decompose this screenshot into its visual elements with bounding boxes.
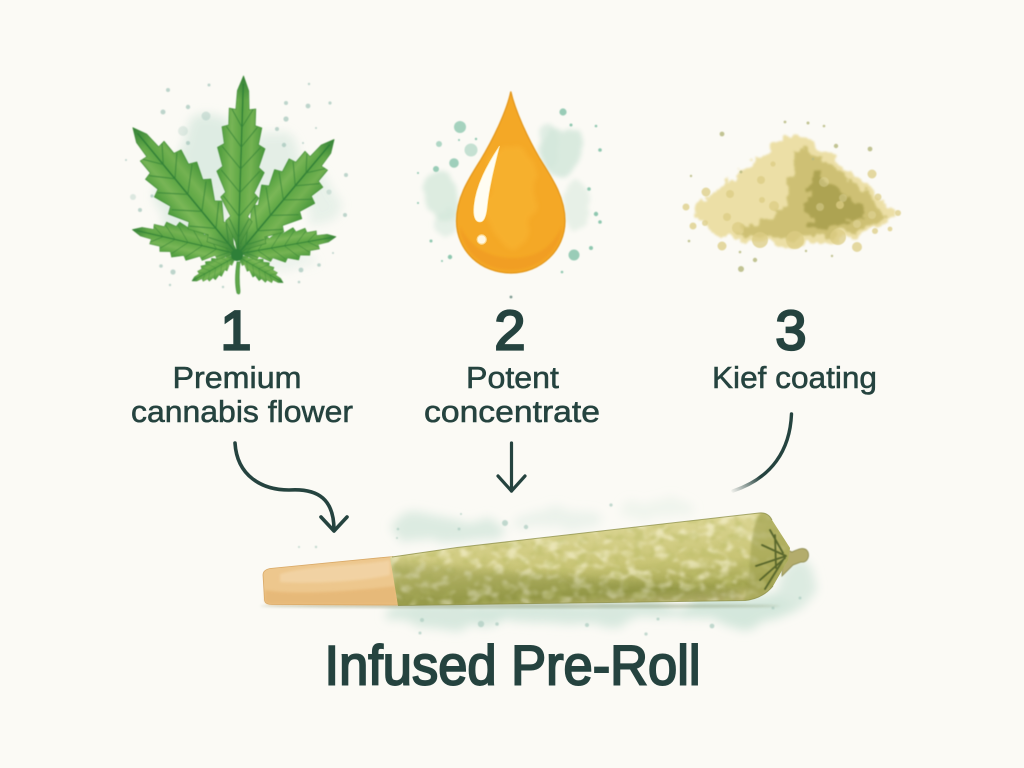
paper tip highlight: [280, 560, 390, 583]
twist folds: [756, 530, 786, 589]
kief granules: [682, 121, 901, 272]
pre-roll splatter dots: [298, 503, 802, 636]
arrow: flower to pre-roll: [235, 443, 347, 531]
step 1 label: cannabis flower: [131, 394, 353, 429]
arrow: concentrate to pre-roll: [498, 443, 525, 491]
drop splatter dots: [417, 108, 602, 298]
step 3 label: Kief coating: [712, 360, 877, 395]
pile shadow side: [735, 150, 885, 238]
icon: concentrate oil drop: [417, 92, 602, 298]
pile deep shadow: [808, 172, 868, 228]
drop small highlight: [477, 235, 486, 244]
paper filter tip: [263, 556, 398, 605]
step 2 label: Potent: [466, 360, 559, 395]
step 1 number: 1: [220, 298, 252, 362]
icon: infused pre-roll: [260, 498, 815, 636]
pre-roll shadow: [260, 604, 780, 608]
leaf splatter dots: [125, 83, 348, 288]
pile base: [692, 135, 896, 246]
rolled body outline: [392, 513, 773, 606]
paper tip shading: [264, 586, 398, 605]
drop glow: [486, 145, 538, 245]
step 2 label: [424, 360, 600, 429]
step 1 label: [131, 360, 353, 429]
step 1 label: Premium: [172, 360, 302, 395]
step 2 number: 2: [494, 298, 526, 362]
step 3 number: 3: [775, 298, 807, 362]
icon: kief powder pile: [682, 121, 901, 272]
icon: cannabis leaf: [112, 75, 354, 294]
drop body: [456, 92, 565, 273]
leaf watercolor wash: [155, 114, 336, 268]
leaf blades: [112, 75, 354, 294]
title: Infused Pre-Roll: [324, 634, 700, 696]
arrow: kief to pre-roll: [733, 414, 792, 491]
drop main highlight: [474, 146, 500, 222]
twisted end nub: [782, 548, 809, 576]
drop watercolor wash: [425, 123, 589, 240]
step 2 label: concentrate: [424, 394, 600, 429]
pre-roll watercolor wash: [390, 498, 815, 629]
drop inner shading: [460, 226, 562, 270]
